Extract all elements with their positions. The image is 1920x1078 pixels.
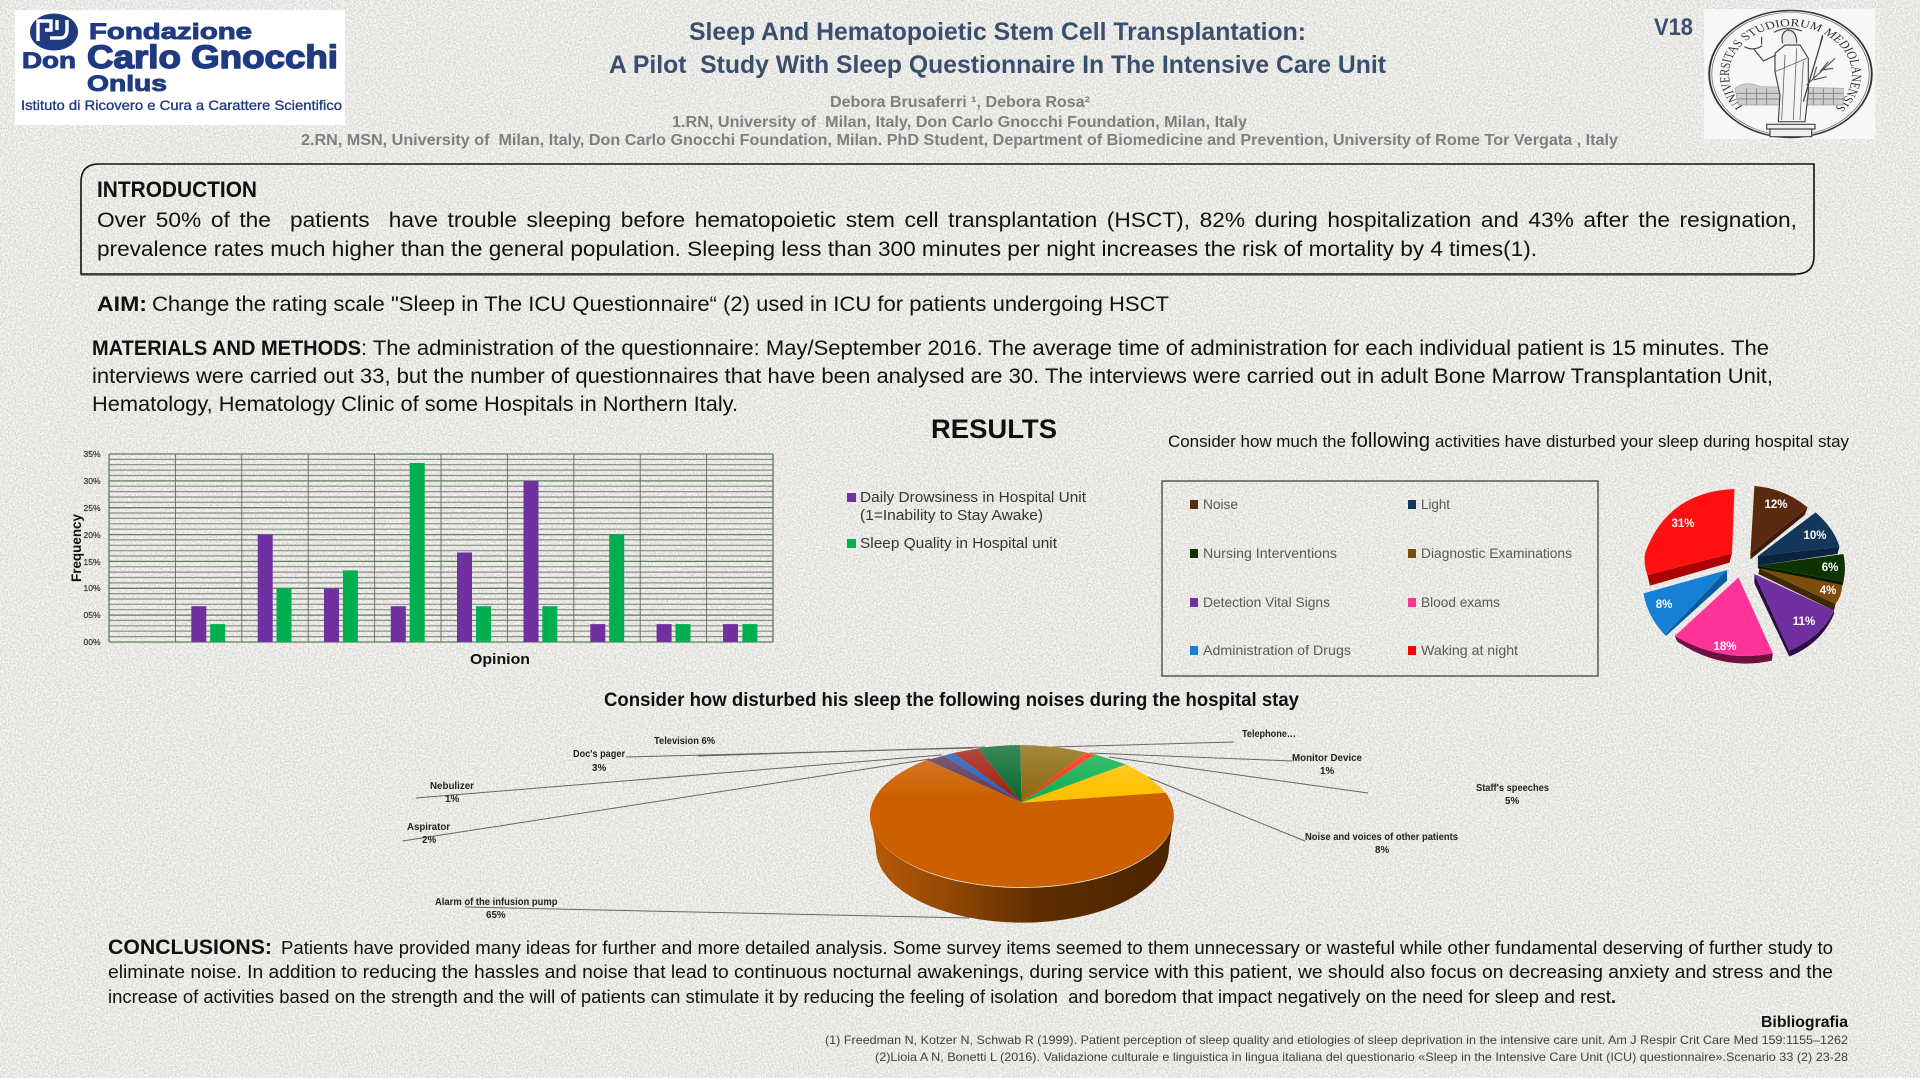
heading: noise question: Consider how disturbed his sleep the following noises during the hospital stay bbox=[604, 690, 1299, 711]
slice labels: Alarm of the infusion pump bbox=[435, 897, 558, 908]
icon: foundation emblem bbox=[30, 14, 78, 50]
logo: Fondazione Don Carlo Gnocchi: Onlus bbox=[87, 71, 167, 96]
poster code V18: V18 bbox=[1654, 14, 1693, 41]
materials and methods: MATERIALS AND METHODS bbox=[92, 336, 361, 360]
slice labels: 8% bbox=[1375, 845, 1389, 856]
pie chart: noises disturbing sleep bbox=[402, 729, 1550, 923]
heading: activities question: activities have disturbed your sleep during hospital stay bbox=[1435, 432, 1849, 451]
bar chart legend: Sleep Quality in Hospital unit bbox=[860, 535, 1058, 552]
authors and affiliations: 2.RN, MSN, University of Milan, Italy, Don Carlo Gnocchi Foundation, Milan. PhD Student, Department of Biomedicine and Prevention, University of Rome Tor Vergata , Italy bbox=[301, 132, 1618, 149]
authors and affiliations: Debora Brusaferri ¹, Debora Rosa² bbox=[830, 94, 1090, 111]
y-axis ticks: 10% bbox=[83, 583, 101, 593]
bibliography: Bibliografia bbox=[1761, 1014, 1848, 1031]
conclusions: Patients have provided many ideas for further and more detailed analysis. Some survey items seemed to them unnecessary or wasteful while other fundamental deserving of further study to bbox=[281, 938, 1833, 958]
pie chart legend bbox=[1162, 481, 1598, 676]
logo: Fondazione Don Carlo Gnocchi: Don bbox=[22, 48, 76, 73]
logo: Fondazione Don Carlo Gnocchi: Carlo Gnocchi bbox=[87, 39, 338, 75]
pie percentage labels: 31% bbox=[1671, 518, 1695, 530]
conclusions bbox=[108, 936, 1833, 1007]
conclusions: increase of activities based on the strength and the will of patients can stimulate it by reducing the feeling of isolation and boredom that impact negatively on the need for sleep and rest . bbox=[108, 987, 1616, 1007]
pie chart legend: Noise bbox=[1203, 496, 1238, 512]
bar chart: daily drowsiness and sleep quality bbox=[68, 449, 773, 668]
y-axis ticks: 25% bbox=[83, 503, 101, 513]
introduction text bbox=[97, 209, 1797, 261]
pie chart legend: Detection Vital Signs bbox=[1203, 594, 1330, 610]
title bbox=[609, 18, 1387, 79]
logo: University of Milan seal: UNIVERSITAS STUDIORUM MEDIOLANENSIS bbox=[1720, 19, 1862, 112]
y-axis ticks: 30% bbox=[83, 476, 101, 486]
x-axis title: Opinion bbox=[470, 651, 530, 668]
slice labels: 1% bbox=[1320, 766, 1334, 777]
y-axis ticks: 00% bbox=[83, 637, 101, 647]
conclusions: CONCLUSIONS: bbox=[108, 936, 272, 959]
pie percentage labels: 11% bbox=[1793, 616, 1815, 628]
materials and methods: interviews were carried out 33, but the number of questionnaires that have been analysed are 30. The interviews were carried out in adult Bone Marrow Transplantation Unit, bbox=[92, 364, 1773, 388]
slice labels: Aspirator bbox=[407, 822, 450, 833]
pie percentage labels: 4% bbox=[1820, 585, 1836, 597]
pie percentage labels: 8% bbox=[1656, 599, 1672, 611]
logo: Fondazione Don Carlo Gnocchi: Istituto di Ricovero e Cura a Carattere Scientifico bbox=[21, 97, 342, 113]
pie percentage labels: 10% bbox=[1803, 530, 1827, 542]
slice labels: 65% bbox=[486, 910, 506, 921]
bar chart legend bbox=[847, 489, 1087, 552]
slice labels bbox=[407, 729, 1550, 921]
bibliography: (1) Freedman N, Kotzer N, Schwab R (1999). Patient perception of sleep quality and etiologies of sleep deprivation in the intensive care unit. Am J Respir Crit Care Med 159:1155–1262 bbox=[825, 1033, 1848, 1047]
slice labels: Staff's speeches bbox=[1476, 783, 1550, 794]
pie chart legend: Administration of Drugs bbox=[1203, 642, 1351, 658]
slice labels: 3% bbox=[592, 763, 606, 774]
heading: activities question bbox=[1168, 430, 1849, 452]
materials and methods bbox=[92, 336, 1773, 416]
pie chart legend: Nursing Interventions bbox=[1203, 545, 1337, 561]
slice labels: 2% bbox=[422, 835, 436, 846]
slice labels: Monitor Device bbox=[1292, 753, 1363, 764]
logo: Fondazione Don Carlo Gnocchi bbox=[15, 10, 345, 125]
bibliography: (2)Lioia A N, Bonetti L (2016). Validazione culturale e linguistica in lingua italiana del questionario «Sleep in the Intensive Care Unit (ICU) questionnaire».Scenario 33 (2) 23-28 bbox=[875, 1050, 1848, 1064]
seal figure: Minerva bbox=[1735, 28, 1843, 137]
introduction text: prevalence rates much higher than the general population. Sleeping less than 300 minutes per night increases the risk of mortality by 4 times(1). bbox=[97, 238, 1537, 261]
logo: Fondazione Don Carlo Gnocchi: Fondazione bbox=[89, 19, 252, 44]
materials and methods: : The administration of the questionnaire: May/September 2016. The average time of administration for each individual patient is 15 minutes. The bbox=[361, 336, 1769, 360]
introduction text: Over 50% of the patients have trouble sleeping before hematopoietic stem cell transplantation (HSCT), 82% during hospitalization and 43% after the resignation, bbox=[97, 209, 1797, 232]
y-axis ticks: 15% bbox=[83, 557, 101, 567]
materials and methods: Hematology, Hematology Clinic of some Hospitals in Northern Italy. bbox=[92, 392, 738, 416]
green bars bbox=[210, 463, 757, 642]
slice labels: Telephone… bbox=[1242, 729, 1296, 740]
pie chart legend: Blood exams bbox=[1421, 594, 1500, 610]
y-axis ticks: 20% bbox=[83, 530, 101, 540]
slice labels: Nebulizer bbox=[430, 781, 474, 792]
slice labels: 1% bbox=[445, 794, 459, 805]
pie chart: activities disturbing sleep bbox=[1643, 486, 1845, 664]
bibliography bbox=[825, 1014, 1848, 1064]
pie chart legend: Diagnostic Examinations bbox=[1421, 545, 1572, 561]
y-axis title: Frequency bbox=[68, 514, 84, 582]
pie percentage labels: 6% bbox=[1822, 562, 1838, 574]
aim: AIM: bbox=[97, 292, 147, 316]
heading: introduction: INTRODUCTION bbox=[97, 177, 257, 202]
y-axis ticks bbox=[83, 449, 101, 647]
title: A Pilot Study With Sleep Questionnaire In The Intensive Care Unit bbox=[609, 51, 1387, 79]
aim: Change the rating scale "Sleep in The ICU Questionnaire“ (2) used in ICU for patients undergoing HSCT bbox=[152, 292, 1169, 316]
heading: activities question: following bbox=[1351, 430, 1430, 452]
slice labels: 5% bbox=[1505, 796, 1519, 807]
slice labels: Television 6% bbox=[654, 736, 715, 747]
pie chart legend: Light bbox=[1421, 496, 1450, 512]
slice labels: Noise and voices of other patients bbox=[1305, 832, 1459, 843]
y-axis ticks: 05% bbox=[83, 610, 101, 620]
slice labels: Doc's pager bbox=[573, 749, 625, 760]
purple bars bbox=[191, 481, 738, 642]
heading: results: RESULTS bbox=[931, 414, 1057, 444]
logo: University of Milan seal bbox=[1704, 9, 1875, 139]
pie percentage labels bbox=[1656, 499, 1838, 653]
bar chart legend: (1=Inability to Stay Awake) bbox=[860, 507, 1043, 524]
pie percentage labels: 18% bbox=[1713, 641, 1737, 653]
3d pie bbox=[870, 745, 1174, 923]
heading: activities question: Consider how much the bbox=[1168, 432, 1346, 451]
authors and affiliations: 1.RN, University of Milan, Italy, Don Carlo Gnocchi Foundation, Milan, Italy bbox=[672, 114, 1247, 131]
y-axis ticks: 35% bbox=[83, 449, 101, 459]
pie percentage labels: 12% bbox=[1764, 499, 1788, 511]
pie chart legend: Waking at night bbox=[1421, 642, 1518, 658]
authors and affiliations bbox=[301, 94, 1618, 149]
conclusions: eliminate noise. In addition to reducing the hassles and noise that lead to continuous nocturnal awakenings, during service with this patient, we should also focus on decreasing anxiety and stress and the bbox=[108, 962, 1833, 982]
title: Sleep And Hematopoietic Stem Cell Transplantation: bbox=[689, 18, 1306, 46]
panel: introduction bbox=[81, 164, 1814, 275]
leader lines bbox=[402, 742, 1368, 918]
bar chart legend: Daily Drowsiness in Hospital Unit bbox=[860, 489, 1087, 506]
